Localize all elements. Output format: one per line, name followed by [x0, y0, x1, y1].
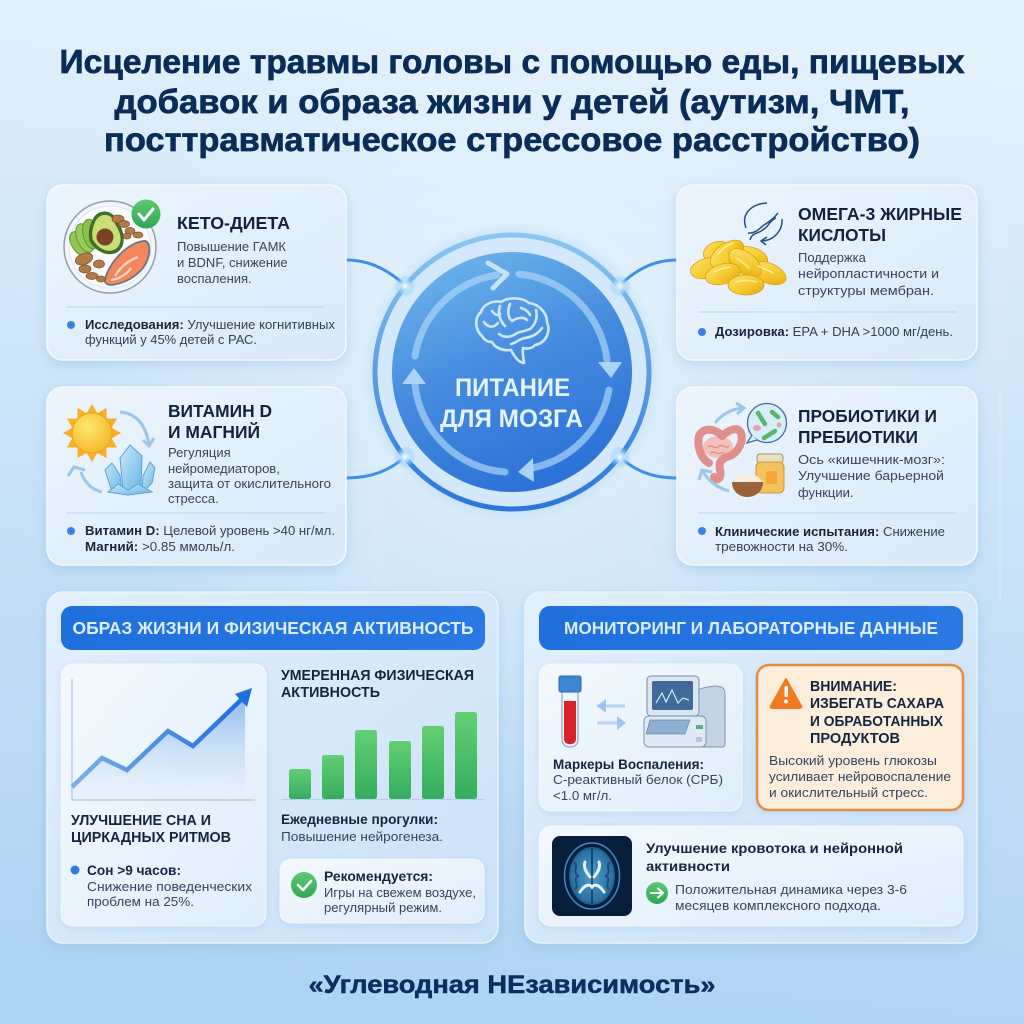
section header [539, 606, 963, 650]
target levels note [67, 524, 335, 554]
blood flow heading [646, 840, 903, 874]
warning text: усиливает нейровоспаление [769, 769, 951, 784]
card description [798, 250, 939, 298]
card description [798, 452, 945, 500]
activity heading: АКТИВНОСТЬ [281, 684, 380, 701]
recommendation box: Игры на свежем воздухе, [324, 885, 476, 900]
warning heading: ВНИМАНИЕ: [810, 678, 897, 695]
card description: нейромедиаторов, [168, 461, 280, 476]
title: добавок и образа жизни у детей (аутизм, ЧМТ, [114, 83, 910, 120]
line chart [72, 679, 255, 800]
markers text [553, 757, 723, 803]
card description: стресса. [168, 491, 219, 506]
research note [67, 318, 336, 347]
dosage note: Дозировка: EPA + DHA >1000 мг/день. [715, 325, 953, 339]
sub-card: sleep [61, 664, 266, 926]
target levels note: Магний: >0.85 ммоль/л. [85, 540, 235, 554]
card description [177, 239, 288, 286]
central hub: питание для мозга [362, 222, 662, 522]
recommendation box: регулярный режим. [324, 900, 442, 915]
sub-card: blood flow [539, 826, 963, 926]
markers text: С-реактивный белок (СРБ) [553, 772, 723, 787]
panel: образ жизни и физическая активность [47, 592, 498, 943]
warning heading: И ОБРАБОТАННЫХ [810, 713, 943, 730]
research note: функций у 45% детей с РАС. [85, 333, 257, 347]
icon: analyzer machine [644, 676, 725, 747]
card heading [798, 406, 937, 447]
sub-card: inflammation markers [539, 664, 742, 811]
blood flow text: Положительная динамика через 3-6 [675, 882, 907, 897]
icon: brain scan [552, 836, 632, 916]
hub label: ДЛЯ МОЗГА [440, 405, 583, 433]
section header [61, 606, 485, 650]
icon: sun and crystals [63, 404, 155, 495]
recommendation box: Рекомендуется: [324, 869, 433, 884]
markers text: <1.0 мг/л. [553, 788, 612, 803]
title: Исцеление травмы головы с помощью еды, пищевых [60, 43, 965, 80]
warning heading: ПРОДУКТОВ [810, 730, 900, 747]
panel: омега-3 [677, 185, 977, 360]
panel: витамин D и магний [47, 387, 346, 565]
card description: защита от окислительного [168, 476, 331, 491]
icon: green arrow [646, 882, 668, 904]
hub label [440, 374, 583, 433]
card description: Поддержка [798, 250, 867, 265]
title: посттравматическое стрессовое расстройство) [104, 121, 920, 158]
card description: структуры мембран. [798, 283, 934, 298]
cycle arrows [402, 263, 622, 482]
warning text [769, 753, 951, 800]
card description: функции. [798, 485, 854, 500]
sleep note: Снижение поведенческих [87, 879, 253, 894]
warning box [757, 665, 963, 810]
footer brand: «Углеводная НЕзависимость» [308, 971, 716, 999]
icon: omega-3 capsules and DNA [688, 203, 789, 295]
card heading: КИСЛОТЫ [798, 225, 886, 245]
clinical trials note [698, 525, 945, 554]
title [60, 43, 965, 158]
card description: и BDNF, снижение [177, 255, 288, 270]
card heading: ОМЕГА-3 ЖИРНЫЕ [798, 204, 962, 224]
target levels note: Витамин D: Целевой уровень >40 нг/мл. [85, 524, 335, 538]
panel: кето-диета [47, 185, 346, 360]
sleep heading: ЦИРКАДНЫХ РИТМОВ [71, 829, 231, 846]
warning heading: ИЗБЕГАТЬ САХАРА [810, 695, 944, 712]
card description: воспаления. [177, 271, 252, 286]
bar chart [281, 712, 485, 800]
clinical trials note: Клинические испытания: Снижение [715, 525, 945, 539]
blood flow text [675, 882, 907, 913]
sleep heading [71, 812, 231, 846]
panel: пробиотики [677, 387, 977, 565]
sleep note: проблем на 25%. [87, 894, 194, 909]
card description: Регуляция [168, 445, 231, 460]
warning heading [810, 678, 944, 747]
card description: нейропластичности и [798, 266, 939, 281]
icon: brain [476, 298, 548, 363]
card heading: ВИТАМИН D [168, 401, 272, 421]
icon: keto plate [64, 200, 160, 293]
walks note: Ежедневные прогулки: [281, 812, 438, 827]
icon: gut, bacteria, jar [698, 403, 786, 497]
clinical trials note: тревожности на 30%. [715, 540, 848, 554]
icon: warning triangle [771, 679, 801, 708]
card description: Улучшение барьерной [798, 468, 944, 483]
warning text: и окислительный стресс. [769, 785, 928, 800]
card description: Повышение ГАМК [177, 239, 286, 254]
blood flow text: месяцев комплексного подхода. [675, 898, 881, 913]
icon: blood test tube [559, 676, 581, 747]
research note: Исследования: Улучшение когнитивных [85, 318, 336, 332]
walks note: Повышение нейрогенеза. [281, 829, 443, 844]
card description: Ось «кишечник-мозг»: [798, 452, 945, 467]
card heading: КЕТО-ДИЕТА [177, 213, 290, 233]
activity heading: УМЕРЕННАЯ ФИЗИЧЕСКАЯ [281, 667, 474, 684]
warning text: Высокий уровень глюкозы [769, 753, 937, 768]
card heading: ПРОБИОТИКИ И [798, 406, 937, 426]
connector glow points [394, 275, 631, 468]
section header: ОБРАЗ ЖИЗНИ И ФИЗИЧЕСКАЯ АКТИВНОСТЬ [72, 618, 474, 638]
card heading: ПРЕБИОТИКИ [798, 427, 918, 447]
activity heading [281, 667, 474, 701]
markers text: Маркеры Воспаления: [553, 757, 704, 772]
recommendation box [280, 859, 484, 923]
sleep heading: УЛУЧШЕНИЕ СНА И [71, 812, 211, 829]
panel: мониторинг и лабораторные данные [525, 592, 977, 943]
card heading [168, 401, 272, 442]
connector lines [346, 260, 677, 478]
hub label: ПИТАНИЕ [455, 374, 570, 402]
section header: МОНИТОРИНГ И ЛАБОРАТОРНЫЕ ДАННЫЕ [564, 618, 938, 638]
card heading [798, 204, 962, 245]
walks note [281, 812, 443, 844]
sleep note: Сон >9 часов: [87, 863, 181, 878]
card description [168, 445, 331, 506]
blood flow heading: Улучшение кровотока и нейронной [646, 840, 903, 856]
icon: exchange arrows [597, 699, 626, 730]
sleep note [70, 863, 253, 909]
card heading: И МАГНИЙ [168, 421, 260, 442]
blood flow heading: активности [646, 858, 730, 874]
